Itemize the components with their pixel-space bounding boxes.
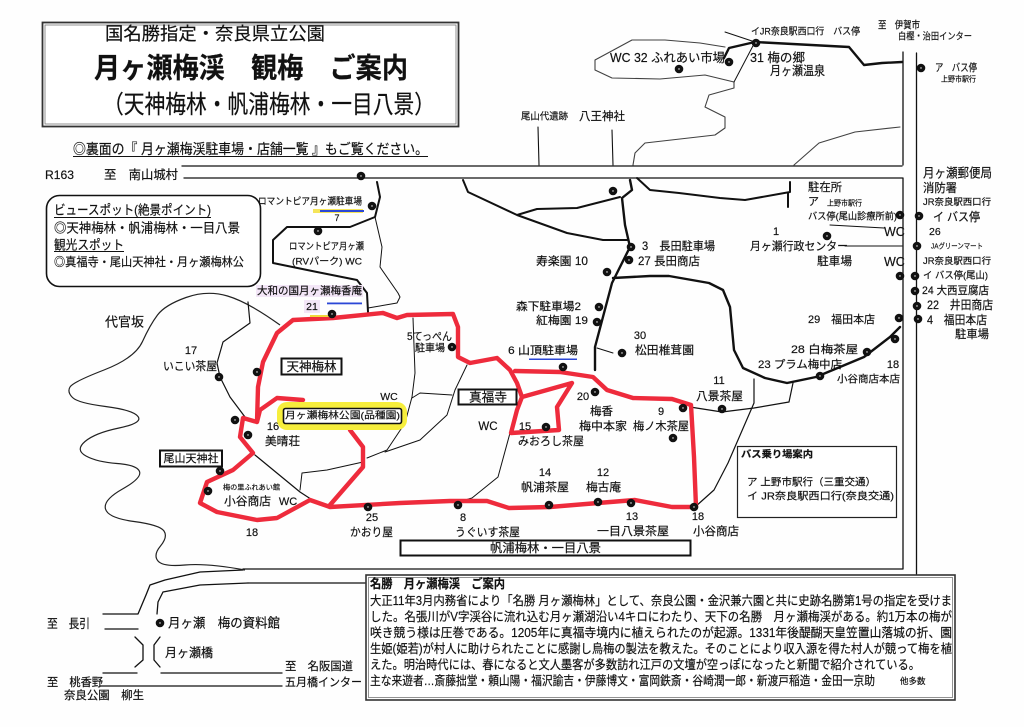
centre map labels: 14 bbox=[539, 467, 551, 479]
centre map labels: みおろし茶屋 bbox=[518, 434, 584, 448]
centre map labels: 梅中本家 bbox=[579, 419, 627, 433]
centre map labels: 12 bbox=[597, 467, 609, 479]
right side labels: 駐車場 bbox=[817, 254, 853, 268]
explanation panel: 大正11年3月内務省により「名勝 月ヶ瀬梅林」として、奈良公園・金沢兼六園と共に史跡名勝第1号の指定を受けま bbox=[370, 593, 952, 608]
title box: 国名勝指定・奈良県立公園 bbox=[105, 24, 325, 44]
explanation panel: 主な来遊者…斎藤拙堂・頼山陽・福沢諭吉・伊藤博文・富岡鉄斎・谷崎潤一郎・新渡戸稲造・金田一京助 bbox=[370, 673, 875, 688]
centre map labels: 18 bbox=[692, 511, 704, 523]
right side labels: WC bbox=[884, 225, 905, 239]
centre map labels: 梅香 bbox=[590, 404, 613, 418]
viewpoints rounded box: ビュースポット(絶景ポイント) bbox=[54, 202, 211, 218]
bus stop guide box: イ JR奈良駅西口行(奈良交通) bbox=[747, 490, 894, 502]
centre map labels: 30 bbox=[634, 330, 646, 342]
road network bbox=[69, 32, 917, 686]
bottom left labels: 至 名阪国道 bbox=[285, 659, 353, 673]
centre map labels: 一目八景茶屋 bbox=[597, 524, 669, 538]
box: 月ヶ瀬梅林公園 with yellow highlight: 月ヶ瀬梅林公園(品種園) bbox=[285, 410, 400, 422]
left map labels: WC bbox=[279, 496, 297, 508]
centre map labels bbox=[380, 239, 743, 538]
centre map labels: 紅梅園 19 bbox=[536, 313, 588, 327]
right side labels: 月ヶ瀬行政センター bbox=[750, 239, 848, 253]
centre map labels: 小谷商店 bbox=[693, 525, 739, 538]
centre map labels: 梅ノ木茶屋 bbox=[633, 419, 689, 433]
box: 尾山天神社 bbox=[160, 450, 222, 466]
left map labels: 18 bbox=[246, 527, 258, 539]
centre map labels: 13 bbox=[626, 511, 638, 523]
right side labels: 28 白梅茶屋 bbox=[791, 342, 858, 356]
left map labels: ロマントピア月ヶ瀬駐車場 bbox=[258, 196, 362, 208]
left map labels: 美晴荘 bbox=[265, 434, 300, 448]
left map labels: 代官坂 bbox=[105, 314, 144, 330]
centre map labels: 5てっぺん bbox=[407, 330, 452, 343]
top area labels: 31 梅の郷 bbox=[750, 51, 805, 65]
right side labels: イ バス停(尾山) bbox=[923, 270, 988, 282]
label: 大和の国月ヶ瀬梅香庵 with highlight: 21 bbox=[306, 301, 318, 313]
bus stop guide box: バス乗り場案内 bbox=[741, 448, 813, 460]
box: 帆浦梅林・一目八景 bbox=[400, 540, 690, 556]
viewpoints rounded box: ◎天神梅林・帆浦梅林・一目八景 bbox=[54, 220, 240, 236]
title box: （天神梅林・帆浦梅林・一目八景） bbox=[103, 91, 435, 119]
box: 天神梅林: 天神梅林 bbox=[286, 359, 337, 374]
centre map labels: 寿楽園 10 bbox=[536, 254, 588, 268]
right side labels: 上野市駅行 bbox=[827, 198, 862, 208]
box: 真福寺 bbox=[458, 390, 516, 404]
left map labels: (RVパーク) WC bbox=[292, 256, 362, 268]
right side labels: 4 福田本店 bbox=[927, 312, 987, 327]
bus stop guide box: ア 上野市駅行（三重交通） bbox=[747, 476, 876, 488]
title box: 月ヶ瀬梅渓 観梅 ご案内 bbox=[94, 52, 408, 84]
label: 大和の国月ヶ瀬梅香庵 with highlight: 大和の国月ヶ瀬梅香庵 bbox=[257, 284, 362, 297]
bottom left labels: 奈良公園 柳生 bbox=[64, 688, 144, 702]
bottom left labels bbox=[47, 616, 362, 702]
right side labels: JR奈良駅西口行 bbox=[923, 196, 991, 207]
left map labels: いこい茶屋 bbox=[163, 359, 217, 373]
top area labels: 尾山代遺跡 bbox=[521, 110, 568, 122]
right side labels: 駐車場 bbox=[955, 327, 989, 341]
centre map labels: 3 長田駐車場 bbox=[642, 239, 715, 253]
centre map labels: 15 bbox=[519, 421, 531, 433]
box: 帆浦梅林・一目八景: 帆浦梅林・一目八景 bbox=[490, 540, 601, 555]
centre map labels: 松田椎茸園 bbox=[635, 343, 694, 357]
right side labels: 駐在所 bbox=[808, 180, 842, 194]
route 163 label: 至 南山城村 bbox=[104, 167, 178, 182]
centre map labels: 6 山頂駐車場 bbox=[508, 343, 578, 357]
title box bbox=[42, 22, 458, 126]
right side labels bbox=[750, 166, 993, 386]
right side labels: バス停(尾山診療所前) bbox=[808, 210, 897, 222]
viewpoints rounded box: ◎真福寺・尾山天神社・月ヶ瀬梅林公 bbox=[54, 254, 244, 269]
left map labels: うぐいす茶屋 bbox=[455, 525, 520, 539]
note: see reverse side: ◎裏面の『 月ヶ瀬梅渓駐車場・店舗一覧 』もご覧ください。 bbox=[73, 141, 428, 157]
left map labels: 25 bbox=[366, 512, 378, 524]
explanation panel: した。名張川がV字渓谷に流れ込む月ヶ瀬湖沿い4キロにわたり、天下の名勝 月ヶ瀬梅渓がある。約1万本の梅が bbox=[370, 609, 952, 624]
top area labels: 八王神社 bbox=[579, 109, 625, 123]
box: 月ヶ瀬梅林公園 with yellow highlight bbox=[277, 402, 407, 430]
bottom left labels: 至 長引 bbox=[47, 617, 90, 631]
right side labels: JR奈良駅西口行 bbox=[923, 255, 991, 266]
left map labels: 16 bbox=[267, 421, 279, 433]
left map labels: 小谷商店 bbox=[224, 495, 271, 508]
centre map labels: 森下駐車場2 bbox=[516, 299, 581, 313]
right side labels: ア bbox=[808, 196, 819, 208]
red walking route lines bbox=[200, 313, 696, 520]
centre map labels: 20 bbox=[577, 391, 589, 403]
centre map labels: 駐車場 bbox=[415, 342, 445, 354]
explanation panel bbox=[366, 575, 955, 700]
highlight markers: parking bbox=[313, 209, 577, 360]
centre map labels: 梅古庵 bbox=[586, 480, 622, 494]
left map labels: 8 bbox=[460, 512, 466, 524]
explanation panel: えた。明治時代には、春になると文人墨客が多数訪れ江戸の文壇が空っぽになったと新聞で紹介されている。 bbox=[370, 657, 920, 672]
top area labels: 上野市駅行 bbox=[941, 74, 976, 84]
explanation panel: 名勝 月ヶ瀬梅渓 ご案内 bbox=[370, 576, 505, 591]
left map labels: 7 bbox=[334, 213, 340, 223]
top area labels: 月ヶ瀬温泉 bbox=[770, 63, 825, 78]
top area labels: 至 伊賀市 bbox=[878, 18, 920, 32]
left map labels: ロマントピア月ヶ瀬 bbox=[289, 240, 364, 252]
right side labels: 18 bbox=[887, 359, 899, 371]
bottom left labels: 五月橋インター bbox=[285, 675, 362, 689]
right side labels: WC bbox=[884, 255, 905, 269]
top area labels: WC 32 ふれあい市場 bbox=[610, 51, 725, 65]
explanation panel: 生姫(姫若)が村人に助けられたことに感謝し烏梅の製法を教えた。そのことにより収入源を得た村人が競って梅を植 bbox=[370, 641, 952, 656]
left map labels: 17 bbox=[185, 345, 197, 357]
box: 尾山天神社: 尾山天神社 bbox=[164, 451, 218, 465]
right side labels: 26 bbox=[929, 226, 941, 238]
label: 大和の国月ヶ瀬梅香庵 with highlight bbox=[256, 284, 363, 317]
centre map labels: 八景茶屋 bbox=[696, 389, 743, 403]
map location dots bbox=[158, 40, 924, 626]
right side labels: 29 福田本店 bbox=[808, 312, 875, 326]
centre map labels: WC bbox=[478, 421, 498, 433]
bottom left labels: 月ヶ瀬 梅の資料館 bbox=[168, 616, 280, 630]
left map labels: 梅の里ふれあい館 bbox=[223, 482, 280, 492]
explanation panel: 咲き競う様は圧巻である。1205年に真福寺境内に植えられたのが起源。1331年後醍醐天皇笠置山落城の折、園 bbox=[370, 625, 952, 640]
top area labels: 白樫・治田インター bbox=[898, 30, 972, 42]
bottom left labels: 月ヶ瀬橋 bbox=[165, 646, 213, 660]
left map labels bbox=[105, 196, 520, 539]
left map labels: かおり屋 bbox=[350, 526, 393, 539]
right side labels: イ バス停 bbox=[933, 210, 980, 224]
right side labels: 24 大西豆腐店 bbox=[922, 283, 989, 297]
explanation panel: 他多数 bbox=[900, 676, 926, 686]
viewpoints rounded box bbox=[46, 196, 260, 286]
top area labels: イJR奈良駅西口行 バス停 bbox=[751, 26, 860, 38]
right side labels: 22 井田商店 bbox=[927, 298, 993, 312]
bus stop guide box bbox=[738, 446, 896, 518]
route 163 label bbox=[45, 167, 178, 182]
centre map labels: WC bbox=[380, 391, 398, 403]
viewpoints rounded box: 観光スポット bbox=[54, 238, 124, 252]
right side labels: JAグリーンマート bbox=[931, 240, 983, 250]
right side labels: 1 bbox=[773, 226, 779, 238]
bottom left labels: 至 桃香野 bbox=[47, 675, 103, 689]
top area labels bbox=[521, 18, 977, 123]
right side labels: 月ヶ瀬郵便局 bbox=[923, 166, 992, 180]
right side labels: 消防署 bbox=[923, 180, 957, 195]
centre map labels: 27 長田商店 bbox=[638, 255, 700, 268]
right side labels: 23 プラム梅中店 bbox=[758, 357, 842, 371]
right side labels: 小谷商店本店 bbox=[837, 372, 900, 386]
centre map labels: 帆浦茶屋 bbox=[521, 480, 569, 494]
centre map labels: 9 bbox=[658, 406, 664, 418]
box: 真福寺: 真福寺 bbox=[469, 390, 507, 404]
centre map labels: 11 bbox=[713, 375, 725, 387]
top area labels: ア バス停 bbox=[935, 61, 977, 74]
route 163 label: R163 bbox=[45, 168, 74, 182]
